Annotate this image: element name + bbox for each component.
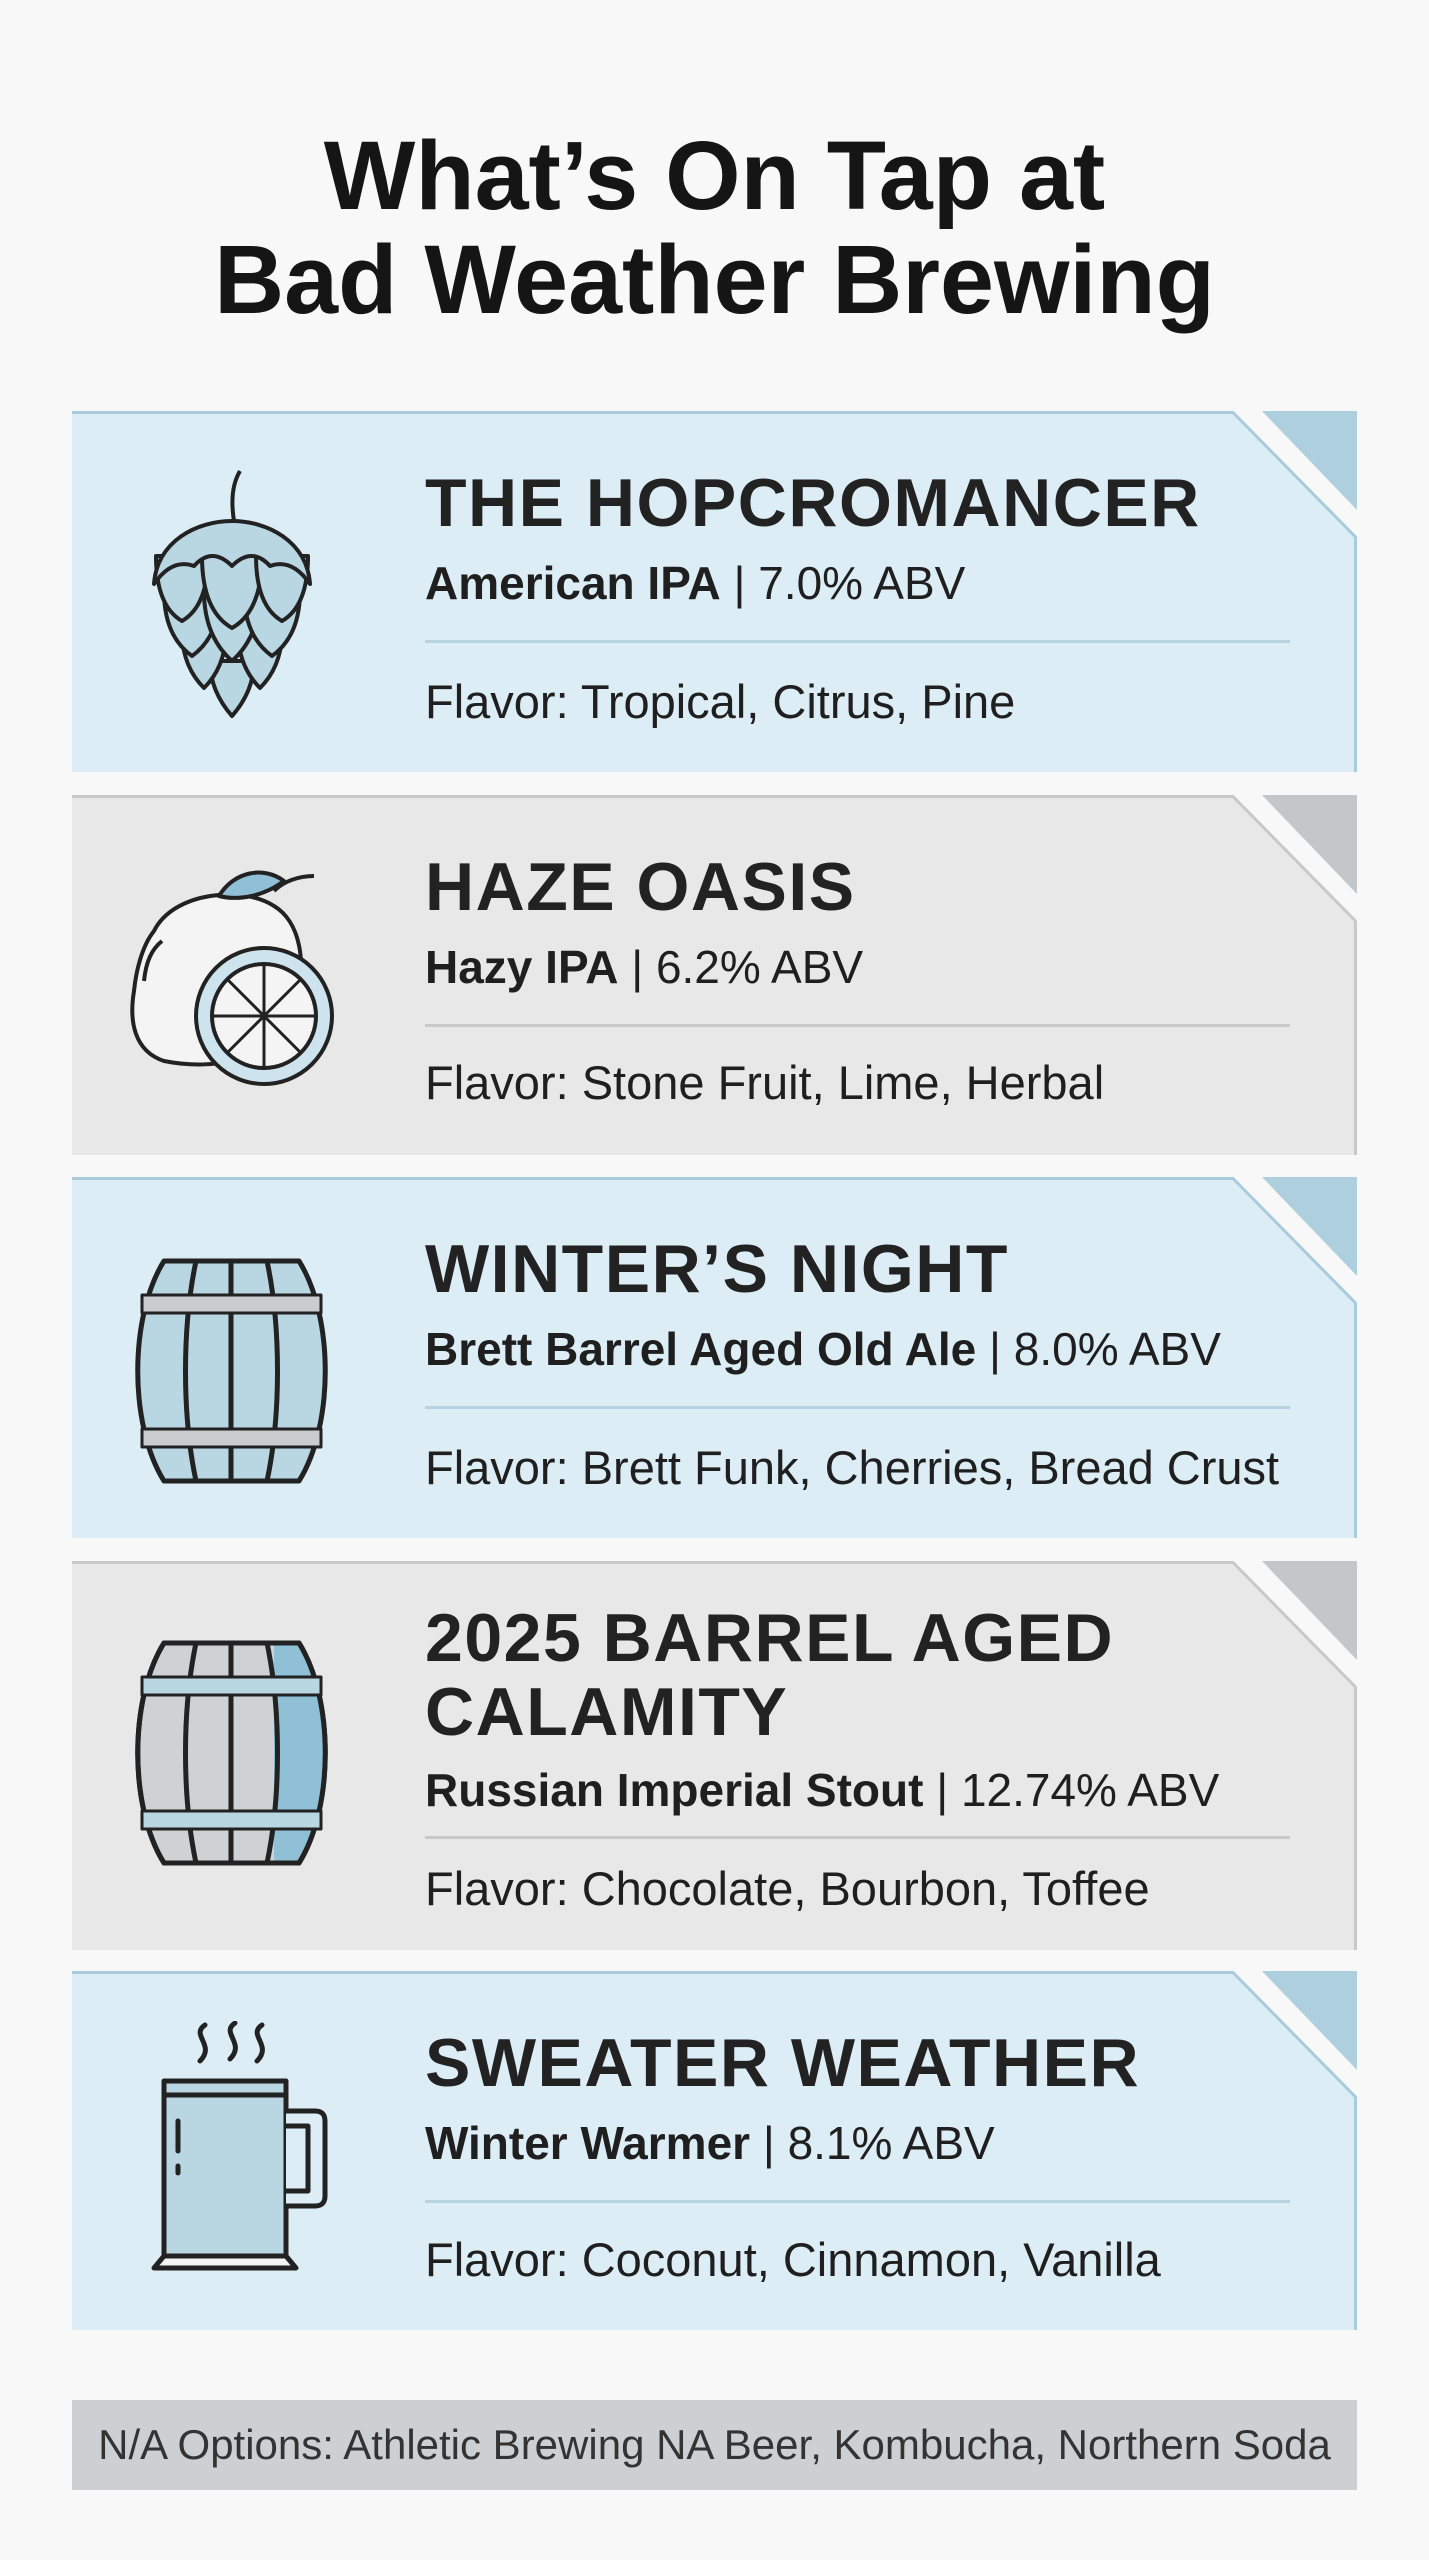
style and ABV: Brett Barrel Aged Old Ale | 8.0% ABV — [425, 1323, 1221, 1375]
panel: Haze Oasis — [72, 795, 1357, 1155]
style and ABV: Hazy IPA | 6.2% ABV — [425, 941, 863, 993]
title: What’s On Tap at — [324, 121, 1105, 230]
style and ABV: American IPA | 7.0% ABV — [425, 557, 965, 609]
flavor: Flavor: Coconut, Cinnamon, Vanilla — [425, 2233, 1161, 2286]
name: THE HOPCROMANCER — [425, 465, 1201, 541]
title: Bad Weather Brewing — [214, 225, 1215, 334]
name — [425, 1600, 1114, 1750]
panel: 2025 Barrel Aged Calamity — [72, 1561, 1357, 1950]
panel: Winter's Night — [72, 1177, 1357, 1538]
name: WINTER’S NIGHT — [425, 1231, 1009, 1307]
icon: hop cone — [152, 470, 312, 718]
icon: steaming mug — [152, 2021, 328, 2270]
flavor: Flavor: Brett Funk, Cherries, Bread Crust — [425, 1441, 1279, 1494]
flavor: Flavor: Chocolate, Bourbon, Toffee — [425, 1862, 1150, 1915]
icon: barrel — [135, 1640, 328, 1866]
footer: N/A options: N/A Options: Athletic Brewing NA Beer, Kombucha, Northern Soda — [98, 2421, 1331, 2468]
name: HAZE OASIS — [425, 849, 856, 925]
name: CALAMITY — [425, 1674, 788, 1750]
style and ABV: Winter Warmer | 8.1% ABV — [425, 2117, 995, 2169]
name: 2025 BARREL AGED — [425, 1600, 1114, 1676]
icon: lemon — [130, 870, 334, 1086]
icon: barrel — [135, 1258, 328, 1484]
style and ABV: Russian Imperial Stout | 12.74% ABV — [425, 1764, 1219, 1816]
title — [214, 121, 1215, 334]
panel: The Hopcromancer — [72, 411, 1357, 772]
panel: Sweater Weather — [72, 1971, 1357, 2330]
flavor: Flavor: Stone Fruit, Lime, Herbal — [425, 1056, 1104, 1109]
flavor: Flavor: Tropical, Citrus, Pine — [425, 675, 1015, 728]
name: SWEATER WEATHER — [425, 2025, 1140, 2101]
footer: N/A options — [72, 2400, 1357, 2490]
